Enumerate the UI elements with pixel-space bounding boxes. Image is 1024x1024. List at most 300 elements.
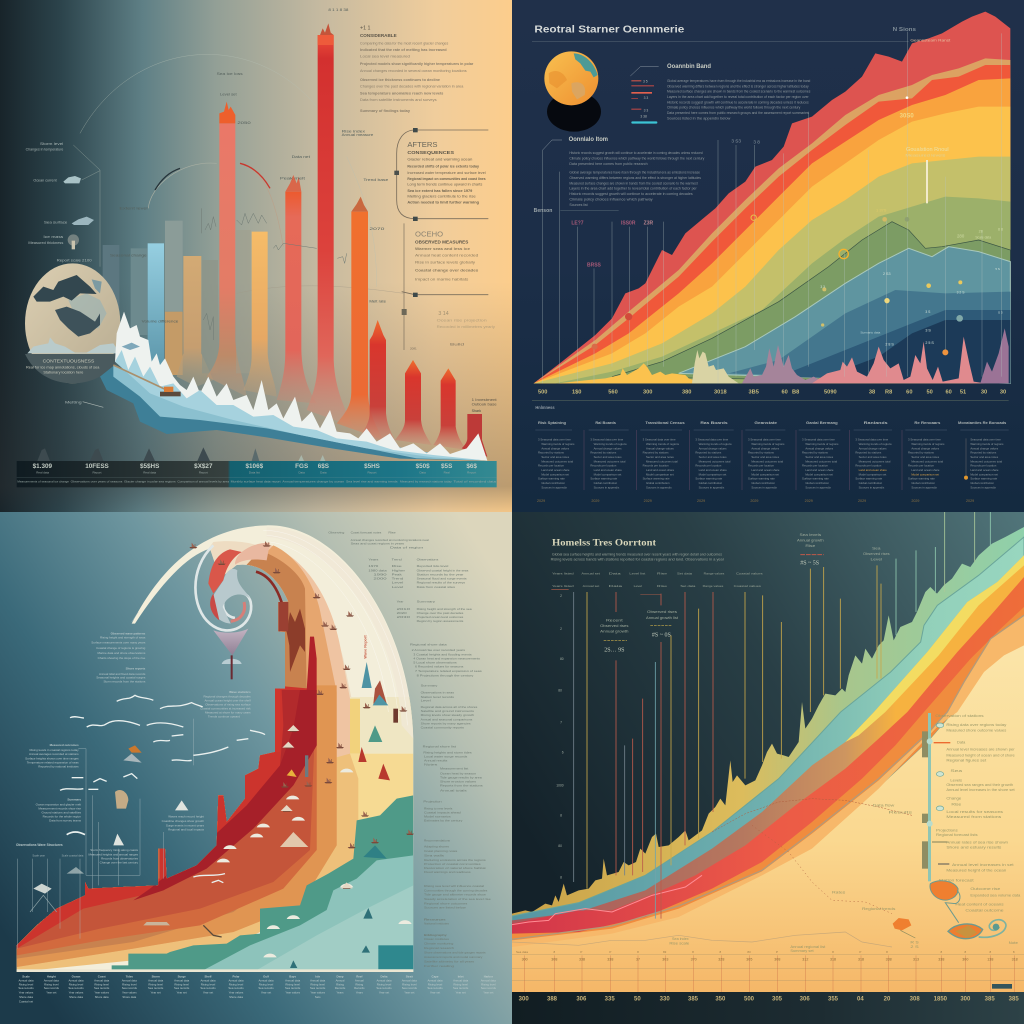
- table: region columns: Records per location: [643, 464, 669, 468]
- table: region columns: Measured outcomes total: [805, 459, 837, 463]
- header rows: Level list: [629, 572, 646, 576]
- data band: values per decade: $5HS: [364, 463, 380, 470]
- table: bottom columns: Storm: [152, 975, 160, 979]
- text block: considerable: Comparing the data for the most recent glacier changes: [360, 41, 449, 45]
- header rows: Level: [634, 584, 642, 588]
- callout: value middle: Annual growth list: [646, 616, 678, 620]
- x axis values: B8: [792, 389, 799, 395]
- text block: right side notes: Rising to new levels: [424, 806, 453, 810]
- text block: right side notes: Reported tide level: [417, 564, 449, 568]
- table: region columns: Surface warming rate: [908, 477, 935, 481]
- x axis upper labels and grid: Sea data: [516, 950, 528, 954]
- text block: right side notes: 2030: [397, 615, 411, 619]
- table: region columns: Records per location: [695, 464, 722, 468]
- text block: right side notes: 2000: [373, 576, 387, 580]
- panel: stacked area chart on navy (top right): 3 8: [753, 139, 760, 144]
- table: region columns: 3 Seasonal data over time: [802, 438, 835, 442]
- callout: ocean: 1 Investment: [472, 398, 497, 402]
- text block: upper left notes: Storm records from the stations: [103, 679, 146, 683]
- table: region columns: Sources in appendix: [541, 485, 568, 489]
- table: region columns: Hnlmness: [535, 405, 555, 410]
- table: region columns: Risk Sptaining: [538, 420, 567, 425]
- table: region columns: Warming trends of regions: [911, 442, 945, 446]
- data band: values per decade: [17, 461, 497, 487]
- text block: right side notes: Satellite altimetry for all years: [424, 960, 475, 964]
- text block: right side notes: Resources: [424, 918, 446, 922]
- data band: values per decade: Glacier change in polar sea regions: [124, 479, 176, 483]
- x axis upper labels and grid: 318: [1012, 958, 1018, 962]
- bar caps: flame spikes: [219, 23, 368, 212]
- data band: values per decade: Total of recorded data: [453, 479, 496, 483]
- text block: upper left notes: Waves reach record height: [168, 815, 204, 819]
- table: bottom columns: Coastal set: [19, 999, 33, 1003]
- table: region columns: Land and ocean share: [911, 468, 940, 472]
- bar value labels: 2070: [369, 227, 385, 231]
- table: region columns: Global contribution: [541, 481, 565, 485]
- table: bottom columns: Year set: [404, 991, 415, 995]
- table: region columns: Warming trends of regions: [594, 442, 627, 446]
- table: bottom columns: Sea records: [427, 986, 443, 990]
- x axis upper labels and grid: 328: [718, 958, 724, 962]
- text block: right side notes: Restoration of natural shore habitat: [424, 866, 486, 870]
- data band: values per decade: Data: [298, 471, 305, 475]
- data band: values per decade: $106$: [246, 463, 264, 470]
- table: region columns: Annual change values: [805, 446, 834, 450]
- dark footer band with axis values: 306: [800, 997, 810, 1003]
- header rows: [552, 572, 763, 588]
- table: region columns: Sources in appendix: [646, 485, 672, 489]
- text block: upper left notes: Surface measurements over many years: [91, 640, 146, 644]
- text block: complete item description: Observed warming differs between regions and the effect is stronger at higher latitudes: [569, 176, 701, 180]
- table: bottom columns: Year values: [285, 991, 301, 995]
- x axis upper labels and grid: 8: [637, 950, 639, 954]
- table: bottom columns: Rising level: [310, 982, 325, 986]
- y axis ticks: 80: [560, 657, 564, 661]
- stacked area layers: [534, 12, 1010, 383]
- table: region columns: Seasonal data over time: [970, 438, 1001, 442]
- x axis values: 60: [946, 389, 952, 395]
- text block: right side notes: 5 Local shore observations: [413, 661, 457, 665]
- spiral curl: [195, 543, 288, 631]
- callout: value top: Rise: [805, 544, 816, 548]
- table: bottom columns: Annual data: [481, 979, 496, 983]
- text block: upper left notes: Marine data and shore observations: [97, 651, 146, 655]
- table: bottom columns: Sea records: [285, 986, 301, 990]
- text block: right side notes: Rise: [392, 564, 402, 568]
- text block: right side notes: Shore observations and tide gauges reports: [424, 950, 486, 954]
- text block: right side notes: Communities through the coming decades: [424, 888, 488, 892]
- callout: afters: CONSEQUENCES: [407, 150, 454, 155]
- heading: lower left chart: Observations Wave Structures: [16, 843, 63, 847]
- table: region columns: Ranlands: [864, 420, 889, 425]
- x axis values: [538, 389, 1006, 395]
- table: bottom columns: Rising level: [69, 982, 84, 986]
- panel: stacked area chart on navy (top right): 3 S3: [731, 139, 741, 144]
- table: bottom columns: Sea records: [148, 986, 164, 990]
- table: region columns: Land and ocean share: [699, 468, 727, 472]
- text block: right side notes: Regional shore data: [410, 643, 447, 647]
- text block: station notes: Regional trends: [862, 907, 896, 911]
- chart labels inside areas: 8 8: [998, 228, 1003, 232]
- table: region columns: 2029: [911, 499, 919, 503]
- text block: considerable: Annual changes recorded in several ocean monitoring locations: [360, 69, 467, 73]
- table: bottom columns: Year values: [122, 991, 137, 995]
- table: region columns: Land and ocean share: [859, 468, 887, 472]
- title: Homelss Tres Oorrtont: [552, 537, 656, 547]
- text block: right side notes: Trend: [392, 558, 402, 562]
- x axis upper labels and grid: 8: [940, 950, 942, 954]
- callout: afters: AFTERS: [407, 140, 438, 149]
- text block: right side notes: Year: [397, 600, 403, 604]
- table: bottom columns: Annual data: [174, 979, 190, 983]
- text block: station notes: Data flow: [873, 804, 895, 808]
- table: region columns: Ral Boards: [595, 420, 617, 425]
- dark footer band with axis values: 04: [857, 997, 864, 1003]
- table: bottom columns: Deep: [337, 975, 344, 979]
- table: bottom columns: Year values: [310, 991, 326, 995]
- text block: right side notes: Regional results of the surveys: [417, 580, 466, 584]
- text block: right side notes: 8 Projections through the century: [417, 673, 474, 677]
- x axis upper labels and grid: P: [580, 950, 582, 954]
- text block: right side notes: Station level records: [421, 695, 455, 699]
- table: region columns: Warming trends of regions: [699, 442, 732, 446]
- intro lines: Rising levels across bands with stations reported for coastal regions and land. Observations in a year: [551, 558, 724, 562]
- table: region columns: Surface warming rate: [695, 477, 723, 481]
- panel: rising band chart (bottom right): [512, 512, 1024, 1024]
- chart labels inside areas: 28: [979, 230, 983, 234]
- table: region columns: Sector and area notes: [970, 455, 999, 459]
- left annotations with ship icons: Sea surface: [44, 221, 67, 225]
- icon: oil rig on ice: [113, 365, 181, 396]
- text block: right side notes: Ocean heat by season: [440, 772, 476, 776]
- heading: ocean band block: Ooannbin Band: [667, 64, 711, 70]
- table: region columns: Sources in appendix: [751, 485, 778, 489]
- table: region columns: Land and ocean share: [646, 468, 675, 472]
- bar value labels: 8 1 1 8 38: [328, 8, 349, 12]
- heading: lower left chart: Scale coastal data: [62, 853, 84, 857]
- text block: upper left notes: Measured heights and annual ranges: [88, 852, 138, 856]
- text block: station notes: Heat content of oceans: [955, 902, 1004, 906]
- text block: right side notes: Notes: [424, 762, 438, 766]
- chart labels inside areas: Geanssteam Ranst: [910, 38, 950, 42]
- text block: considerable: Summary of findings today: [360, 109, 410, 113]
- chart labels inside areas: 2 5 S: [925, 341, 934, 345]
- callout: value left: 2S… 9S: [604, 647, 624, 653]
- x axis upper labels and grid: 8: [989, 950, 991, 954]
- x axis upper labels and grid: 338: [579, 958, 585, 962]
- heading: complete item block: [543, 137, 608, 150]
- text block: right side notes: Coast forecast notes: [351, 530, 382, 534]
- text block: station notes: Annual regional list: [790, 945, 825, 949]
- text block: complete item description: Measured surface changes are shown in bands from the coolest scenario to the warmest: [569, 181, 698, 185]
- legend bars: 3 3: [644, 96, 648, 100]
- legend bars: 3 38: [640, 114, 647, 118]
- text block: right side notes: Annual changes recorded at monitoring locations near: [351, 538, 429, 542]
- header rows: Range values: [704, 572, 725, 576]
- callout: value top: Level: [870, 558, 883, 562]
- table: region columns: Land and ocean share: [805, 468, 834, 472]
- pink value labels: LE?7: [571, 221, 584, 227]
- table: bottom columns: Year set: [46, 991, 57, 995]
- table: bottom columns: Annual data: [122, 979, 137, 983]
- text block: station notes: Measured shore outcome values: [946, 729, 1007, 733]
- text block: station notes: Annual rates of sea rise shown: [946, 840, 1008, 844]
- text block: right side notes: Rise: [388, 530, 396, 534]
- x axis values: 500: [538, 389, 547, 395]
- table: bottom columns: Annual data: [453, 979, 469, 983]
- text block: upper left notes: Regional and local impacts: [168, 828, 204, 832]
- table: bottom columns: Gulf: [263, 975, 269, 979]
- bar value labels: Sea ice loss: [217, 72, 243, 76]
- text block: right side notes: Projection: [423, 800, 442, 804]
- header rows: Rise: [657, 572, 668, 576]
- x axis values: 300: [643, 389, 652, 395]
- text block: right side notes: Shore reports by many agencies: [421, 721, 471, 725]
- text block: right side notes: Regional data across all of the shores: [421, 705, 478, 709]
- table: bottom columns: Annual data: [310, 979, 326, 983]
- text block: right side notes: 1980 data: [368, 568, 387, 572]
- pink value labels: ISS0R: [621, 221, 636, 227]
- table: region columns: Sources in appendix: [859, 485, 885, 489]
- pale orange outer band: [512, 615, 1024, 947]
- vertical callout leaders: [17, 612, 193, 949]
- text block: ocean band description: Observed warming differs between regions and the effect is stronger across higher latitudes today: [667, 84, 809, 88]
- table: bottom columns: Rising level: [44, 982, 59, 986]
- left annotations with ship icons: Ocean current: [33, 179, 57, 183]
- bar chart: rising columns: [103, 35, 487, 457]
- table: region columns: Transitional Census: [645, 420, 685, 425]
- text block: station notes: Measured from stations: [946, 815, 1002, 819]
- table: bottom columns: Cape: [432, 975, 439, 979]
- table: region columns: Warming trends of regions: [541, 442, 575, 446]
- text block: station notes: Station forecast: [939, 879, 974, 883]
- table: bottom columns: Annual: [355, 979, 364, 983]
- table: region columns: 2029: [750, 499, 758, 503]
- table: bottom columns: Rising level: [201, 982, 216, 986]
- panel: stacked area chart on navy (top right): [512, 0, 1024, 512]
- table: bottom columns: Bays: [289, 975, 296, 979]
- y axis ticks: 6: [562, 751, 564, 755]
- table: bottom columns: Year set: [151, 991, 161, 995]
- x axis values: 3B5: [748, 389, 759, 395]
- text block: considerable: Observed ice thickness continues to decline: [360, 78, 440, 82]
- text block: upper left notes: Measurement records show rise: [38, 806, 81, 810]
- text block: right side notes: Station records by the year: [417, 572, 463, 576]
- pink value labels: Z3R: [644, 221, 654, 227]
- text block: right side notes: Projected ocean level outcomes: [417, 615, 464, 619]
- x axis values: 380: [682, 389, 691, 395]
- table: region columns: Annual change values: [646, 446, 674, 450]
- heading: lower left chart: Scale year: [32, 853, 45, 857]
- spiky series top: [512, 527, 1024, 922]
- table: region columns: Sources in appendix: [805, 485, 832, 489]
- text block: right side notes: Observing: [328, 530, 345, 534]
- table: bottom columns: Sea records: [310, 986, 326, 990]
- table: bottom columns: Annual data: [148, 979, 164, 983]
- table: region columns: 2029: [805, 499, 813, 503]
- table: region columns: Records per location: [748, 464, 774, 468]
- bar value labels: Data net: [292, 155, 310, 159]
- text block: right side notes: Satellite and ground instruments: [421, 709, 475, 713]
- table: region columns: Model comparison set: [541, 472, 569, 476]
- table: region columns: Sources in appendix: [970, 485, 997, 489]
- callout: value top: [797, 533, 890, 566]
- table: region columns: 2029: [537, 499, 545, 503]
- text block: upper left notes: Coastline changes show growth: [162, 819, 204, 823]
- text block: upper left notes: Surface heights shown over time ranges: [25, 756, 79, 760]
- text block: right side notes: 2 Annual rise over recorded years: [412, 648, 466, 652]
- x axis upper labels and grid: 8: [832, 950, 834, 954]
- glacier ice spikes: [100, 312, 487, 461]
- text block: upper left notes: Coastal communities at increased risk: [200, 706, 251, 710]
- bar value labels: 2050: [237, 121, 251, 125]
- text block: right side notes: Sources are listed below: [424, 906, 467, 910]
- table: region columns: Reported by stations: [695, 451, 722, 455]
- x axis values: 30: [981, 389, 987, 395]
- table: region columns: Sources in appendix: [594, 485, 620, 489]
- icon: orange organ blobs and leaf: [893, 881, 1006, 939]
- table: region columns: Warming trends of regions: [859, 442, 892, 446]
- callout: afters: Action needed to limit further warming: [407, 200, 479, 204]
- table: region columns: Global contribution: [699, 481, 723, 485]
- callout: ocean: Ocean rise projection: [437, 318, 487, 322]
- brown band: [512, 555, 1024, 944]
- dark footer band with axis values: 385: [1009, 997, 1019, 1003]
- table: bottom columns: Sea records: [376, 986, 392, 990]
- table: bottom columns: Year set: [456, 991, 466, 995]
- text block: right side notes: Years: [368, 558, 379, 562]
- left annotations with ship icons: Measured thickness: [28, 241, 64, 245]
- table: region columns: Measured outcomes total: [751, 459, 783, 463]
- text block: right side notes: National institutes: [424, 922, 450, 926]
- text block: ocean band description: Layers in the area chart add together to reveal total contribution of each factor per region over: [667, 95, 810, 99]
- table: bottom columns: Inlet: [458, 975, 464, 979]
- bar value labels: Melt rate: [369, 300, 386, 304]
- header rows: Annual set: [583, 584, 600, 588]
- table: bottom columns: Rising level: [229, 982, 244, 986]
- text block: upper left notes: Seasonal heights and coastal surges: [96, 676, 146, 680]
- panel: glacier bar chart (top left): [6, 0, 512, 512]
- text block: upper left notes: Temperature related expansion of seas: [27, 760, 79, 764]
- callout: value middle: [640, 594, 678, 639]
- table: region columns: Global contribution: [911, 481, 935, 485]
- x axis upper labels and grid: P: [776, 950, 778, 954]
- table: bottom columns: Year set: [430, 991, 440, 995]
- funnel and pin below curl: [213, 629, 248, 679]
- text block: upper left notes: Rising height and strength of seas: [100, 636, 146, 640]
- table: bottom columns: Rising level: [428, 982, 443, 986]
- text block: station notes: Projections: [936, 828, 958, 832]
- title: Reotral Starner Oennmerie: [534, 24, 685, 35]
- table: region columns: 2029: [591, 499, 599, 503]
- table: region columns: Reported by stations: [538, 451, 565, 455]
- callout: afters: Increased water temperature and surface level: [407, 171, 486, 175]
- dark footer band with axis values: [512, 992, 1024, 1024]
- table: region columns: Measured outcomes total: [646, 459, 678, 463]
- y axis ticks: 80: [558, 689, 562, 693]
- x axis upper labels and grid: 308: [774, 958, 780, 962]
- table: bottom columns: Sea records: [94, 986, 110, 990]
- callout: ocean: 3 14: [438, 311, 449, 317]
- chart labels inside areas: 3 S: [925, 328, 931, 332]
- header rows: Set data: [677, 572, 692, 576]
- callout: value left: Observed rises: [600, 624, 629, 628]
- dark footer band with axis values: 385: [688, 997, 699, 1003]
- text block: right side notes: Level: [392, 580, 404, 584]
- table: bottom columns: Sea records: [402, 986, 418, 990]
- text block: right side notes: 7 Temperature related expansion of seas: [415, 669, 482, 673]
- table: bottom columns: Rising level: [402, 982, 417, 986]
- bar value labels: Peak melt: [280, 176, 305, 180]
- text block: station notes: R S: [910, 941, 919, 945]
- text block: station notes: Outcome rise: [970, 887, 1001, 891]
- x axis upper labels and grid: P: [609, 950, 611, 954]
- chart labels inside areas: 2 8 S: [885, 343, 894, 347]
- text block: station notes: Observed sea ranges and their growth: [946, 783, 1013, 787]
- wave arch contour lines: [263, 530, 407, 725]
- x axis values: 5090: [824, 389, 837, 395]
- text block: right side notes: Regional shore outcomes: [424, 901, 468, 905]
- table: region columns: Records per location: [802, 464, 828, 468]
- data band: values per decade: Monthly surface heat data report: [231, 479, 281, 483]
- left annotations with ship icons: Ice mass: [43, 235, 64, 239]
- text block: upper left notes: Annual averages recorded at stations: [29, 752, 79, 756]
- table: bottom columns: Year values: [229, 991, 244, 995]
- text block: right side notes: Region by region assessments: [417, 619, 464, 623]
- text block: upper left notes: Coastal change of regions is growing: [96, 646, 146, 650]
- data band: values per decade: Annual temperatures change by ocean: [282, 479, 344, 483]
- table: bottom columns: Sea records: [174, 986, 190, 990]
- legend bars: 3 3: [644, 108, 648, 112]
- dark footer band with axis values: 335: [605, 997, 615, 1003]
- data band: values per decade: Measured by research stations today: [400, 479, 452, 483]
- table: region columns: Measured outcomes total: [970, 459, 1002, 463]
- table: region columns: Sector and area notes: [541, 455, 570, 459]
- bar value labels: Extent level: [119, 207, 148, 211]
- table: region columns: Warming trends of regions: [751, 442, 785, 446]
- text block: right side notes: Level: [392, 585, 404, 589]
- x axis upper labels and grid: 300: [962, 958, 968, 962]
- table: region columns: Land and ocean share: [541, 468, 570, 472]
- y axis ticks: 2: [560, 627, 562, 631]
- table: bottom columns: Annual data: [228, 979, 244, 983]
- text block: station notes: Sea: [950, 769, 962, 773]
- left annotations with ship icons: Storm level: [40, 142, 64, 146]
- callout: ocean: Coastal change over decades: [415, 269, 479, 273]
- table: bottom columns: Shore data: [69, 995, 83, 999]
- x axis upper labels and grid: 338: [938, 958, 944, 962]
- dark footer band with axis values: 355: [828, 997, 839, 1003]
- table: bottom columns: Sea records: [228, 986, 244, 990]
- table: region columns: Measured outcomes total: [911, 459, 943, 463]
- text block: right side notes: Reports from the stations: [440, 784, 483, 788]
- table: bottom columns: Surge: [178, 975, 186, 979]
- x axis upper labels and grid: 8: [964, 950, 966, 954]
- table: region columns: Annual change values: [911, 446, 940, 450]
- text block: right side notes: Regional research: [424, 946, 454, 950]
- text block: right side notes: 2020: [397, 611, 407, 615]
- table: bottom columns: Annual data: [402, 979, 417, 983]
- x axis values: 51: [960, 389, 966, 395]
- text block: upper left notes: Records from observatories: [101, 857, 138, 861]
- x axis upper labels and grid: 313: [913, 958, 919, 962]
- data band: values per decade: Real data: [36, 471, 49, 475]
- text block: upper left notes: Charts showing the slope of the rise: [98, 656, 146, 660]
- text block: station notes: Summary set: [790, 949, 814, 953]
- text block: right side notes: Peak: [392, 572, 402, 576]
- table: region columns: Model comparison set: [646, 472, 674, 476]
- text block: station notes: Rates: [832, 891, 846, 895]
